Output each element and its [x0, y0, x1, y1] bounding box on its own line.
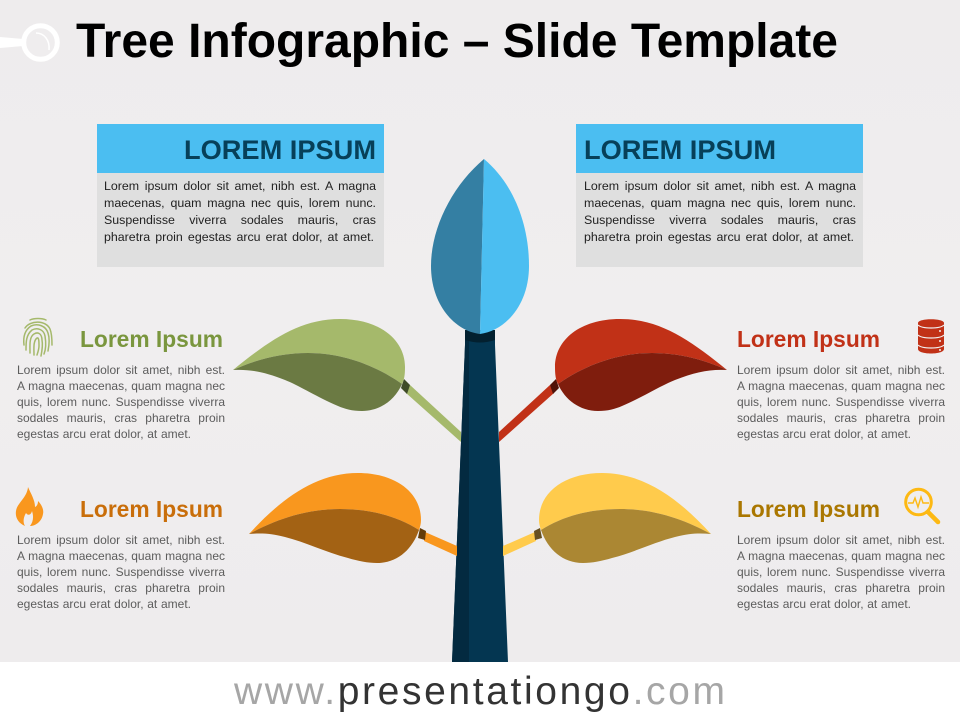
box text: pharetra proin egestas arcu erat dolor, at amet. [104, 230, 374, 244]
header icon: magnifier [0, 23, 60, 62]
orange leaf [249, 473, 457, 563]
body text: egestas arcu erat dolor, at amet. [737, 427, 911, 441]
body text [737, 363, 946, 441]
body text [17, 363, 226, 441]
box text [584, 179, 856, 244]
body text: quis, lorem nunc. Suspendisse viverra [17, 565, 225, 579]
title: Tree Infographic – Slide Template [76, 15, 838, 68]
heading: Lorem Ipsum [80, 326, 223, 352]
body text: Lorem ipsum dolor sit amet, nibh est. [17, 363, 225, 377]
trunk [452, 330, 508, 662]
icon: magnifier with pulse [906, 489, 938, 522]
body text: egestas arcu erat dolor, at amet. [737, 597, 911, 611]
body text: A magna maecenas, quam magna nec [17, 549, 225, 563]
panel: green [17, 318, 226, 441]
central leaf [431, 159, 529, 334]
body text: quis, lorem nunc. Suspendisse viverra [737, 565, 945, 579]
yellow leaf [503, 473, 711, 563]
box heading [576, 124, 863, 173]
panel: red [737, 319, 946, 441]
heading: Lorem Ipsum [737, 496, 880, 522]
box text: Suspendisse viverra sodales mauris, cras [104, 213, 376, 227]
body text: Lorem ipsum dolor sit amet, nibh est. [737, 363, 945, 377]
box text: Lorem ipsum dolor sit amet, nibh est. A magna [104, 179, 376, 193]
body text: quis, lorem nunc. Suspendisse viverra [737, 395, 945, 409]
body text: sodales mauris, cras pharetra proin [737, 581, 945, 595]
icon: database [918, 319, 944, 354]
body text: sodales mauris, cras pharetra proin [17, 581, 225, 595]
body text [17, 533, 226, 611]
body text: Lorem ipsum dolor sit amet, nibh est. [737, 533, 945, 547]
box text: pharetra proin egestas arcu erat dolor, at amet. [584, 230, 854, 244]
box text: Suspendisse viverra sodales mauris, cras [584, 213, 856, 227]
box heading: LOREM IPSUM [584, 135, 776, 165]
body text [737, 533, 946, 611]
body text: egestas arcu erat dolor, at amet. [17, 427, 191, 441]
panel: yellow [737, 488, 946, 611]
panel: top left box [97, 124, 384, 267]
box heading [97, 124, 384, 173]
body text: egestas arcu erat dolor, at amet. [17, 597, 191, 611]
red leaf [499, 319, 727, 442]
body text: sodales mauris, cras pharetra proin [737, 411, 945, 425]
box heading: LOREM IPSUM [184, 135, 376, 165]
green leaf [233, 319, 461, 442]
body text: quis, lorem nunc. Suspendisse viverra [17, 395, 225, 409]
heading: Lorem Ipsum [80, 496, 223, 522]
body text: sodales mauris, cras pharetra proin [17, 411, 225, 425]
box text: maecenas, quam magna nec quis, lorem nunc. [104, 196, 376, 210]
icon: fingerprint [24, 318, 52, 356]
panel: orange [16, 487, 226, 611]
heading: Lorem Ipsum [737, 326, 880, 352]
body text: Lorem ipsum dolor sit amet, nibh est. [17, 533, 225, 547]
box text [104, 179, 376, 244]
body text: A magna maecenas, quam magna nec [17, 379, 225, 393]
box text: maecenas, quam magna nec quis, lorem nunc. [584, 196, 856, 210]
body text: A magna maecenas, quam magna nec [737, 549, 945, 563]
panel: top right box [576, 124, 863, 267]
box text: Lorem ipsum dolor sit amet, nibh est. A magna [584, 179, 856, 193]
footer url: www.presentationgo.com [233, 670, 725, 713]
icon: flame [16, 487, 43, 526]
body text: A magna maecenas, quam magna nec [737, 379, 945, 393]
